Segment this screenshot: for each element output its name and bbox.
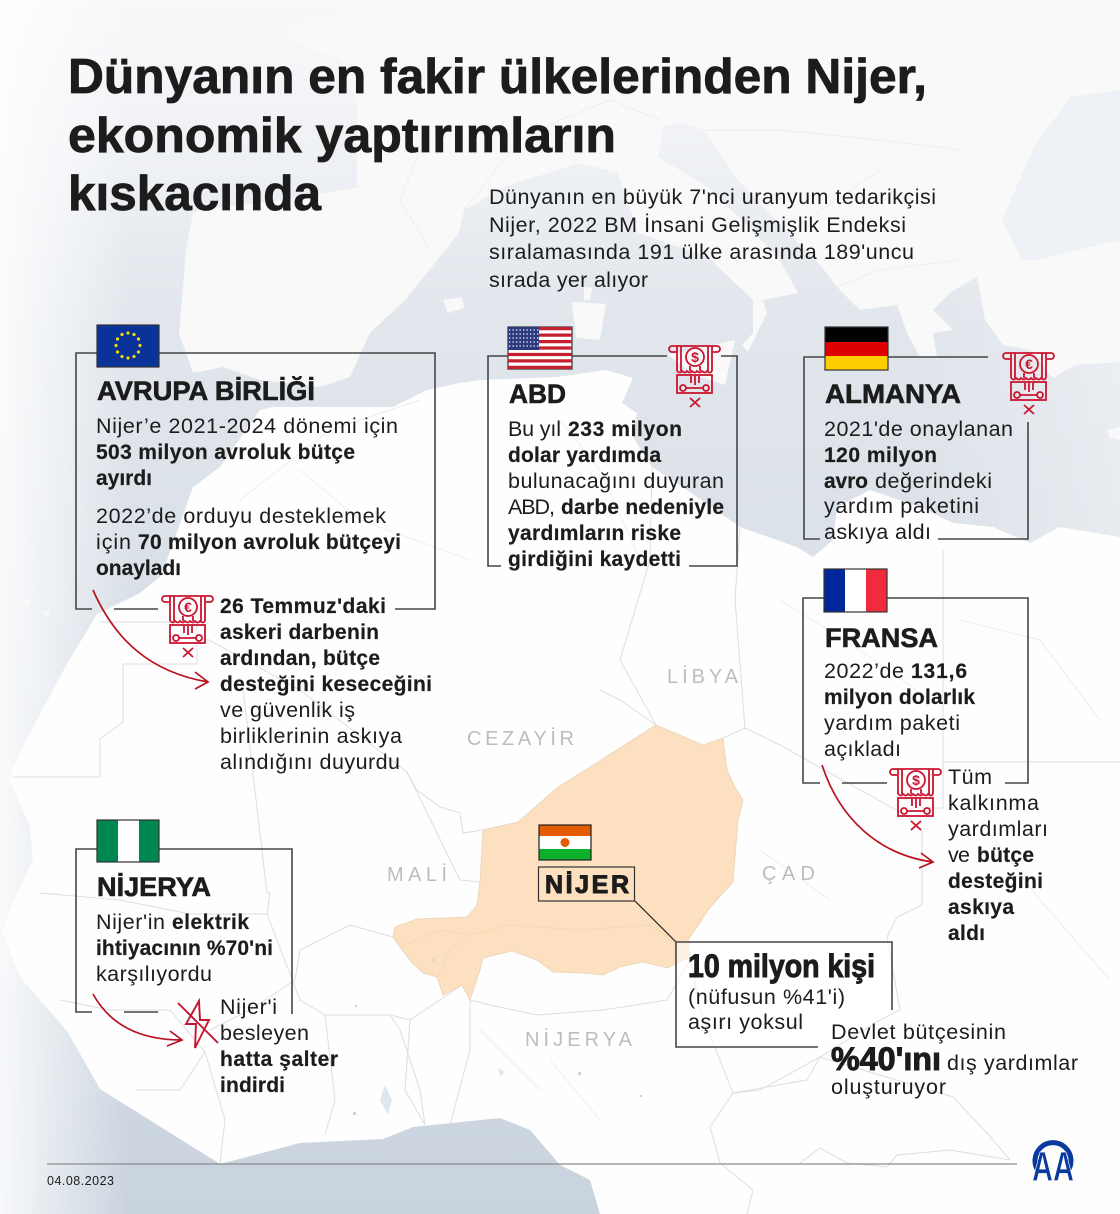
map labels: LİBYA <box>667 665 739 688</box>
callout: 10 milyon kişi <box>676 942 892 1047</box>
text block: response: desteğini keseceğini <box>220 673 432 696</box>
text block: budget: 2022’de orduyu desteklemek <box>96 504 386 528</box>
text block: response: askıya <box>948 896 1014 919</box>
callout: budget share: oluşturuyor <box>831 1075 946 1099</box>
text block: dolar yardımda <box>508 444 661 467</box>
text block: response: birliklerinin askıya <box>220 724 402 748</box>
map labels: CEZAYİR <box>467 727 574 750</box>
text block: response: desteğini <box>948 870 1043 893</box>
arrow <box>93 590 208 689</box>
intro text: sırada yer alıyor <box>489 268 648 292</box>
heading: FRANSA <box>825 623 938 653</box>
text block: response: besleyen <box>220 1021 309 1045</box>
heading: AVRUPA BİRLİĞİ <box>97 375 315 406</box>
panel: Nijerya <box>76 820 338 1097</box>
intro text: Nijer, 2022 BM İnsani Gelişmişlik Endeksi <box>489 213 906 237</box>
footer line <box>47 1163 1017 1165</box>
Black Sea <box>1002 90 1120 260</box>
text block: response <box>948 765 1048 945</box>
flag: Germany <box>825 327 888 370</box>
text block: budget: Nijer’e 2021-2024 dönemi için <box>96 414 398 438</box>
callout: 10 milyon kişi: 10 milyon kişi <box>688 948 875 984</box>
text block: aid: milyon dolarlık <box>824 686 975 709</box>
text block: ABD, <box>508 495 555 519</box>
panel: Fransa <box>803 569 1048 945</box>
text block: budget: onayladı <box>96 557 181 580</box>
text block: aid <box>824 659 975 761</box>
text block: response: ardından, bütçe <box>220 647 380 670</box>
flag: Niger <box>539 825 591 860</box>
intro text: sıralamasında 191 ülke arasında 189'uncu <box>489 240 914 264</box>
flag: Nigeria <box>97 820 159 862</box>
text block <box>508 417 724 571</box>
icon: cash machine cancelled <box>669 346 720 407</box>
flag: France <box>824 569 887 612</box>
icon: cash machine cancelled: € <box>1025 356 1033 372</box>
text block: budget: 503 milyon avroluk bütçe <box>96 441 355 464</box>
callout: budget share: %40'ını <box>831 1041 941 1077</box>
intro text: Dünyanın en büyük 7'nci uranyum tedarikçisi <box>489 185 936 209</box>
text block: budget: için <box>96 530 131 554</box>
text block: response: kalkınma <box>948 791 1039 815</box>
text block: değerindeki <box>875 469 992 493</box>
text block: budget: ayırdı <box>96 467 152 490</box>
heading: ABD <box>509 379 566 409</box>
panel frame <box>76 353 435 609</box>
callout: budget share: dış yardımlar <box>947 1051 1078 1075</box>
icon: power cut <box>178 1001 218 1048</box>
panel frame <box>803 598 1028 783</box>
logo: AA <box>1032 1143 1074 1190</box>
callout: budget share: Devlet bütçesinin <box>831 1020 1006 1044</box>
text block: response: bütçe <box>977 844 1034 867</box>
map labels <box>387 665 815 1051</box>
panel: Avrupa Birliği <box>76 325 435 774</box>
panel frame <box>804 357 1028 539</box>
title <box>68 50 927 221</box>
map labels: ÇAD <box>762 863 815 885</box>
arrow <box>822 765 933 868</box>
text block: aid: 131,6 <box>911 660 967 683</box>
text block: response: Nijer'i <box>220 995 277 1019</box>
text block: electricity: karşılıyordu <box>96 962 212 986</box>
text block: response <box>220 595 432 774</box>
callout: 10 milyon kişi: (nüfusun %41'i) <box>688 985 845 1009</box>
text block: budget <box>96 414 401 580</box>
Africa land <box>2 370 1120 1214</box>
panel: ABD <box>488 327 737 571</box>
icon: cash machine cancelled: $ <box>912 772 920 788</box>
text block: 233 milyon <box>568 418 682 441</box>
arrow <box>93 994 182 1046</box>
icon: cash machine cancelled <box>162 596 213 657</box>
text block: response: ve <box>948 843 970 867</box>
text block: 2021'de onaylanan <box>824 417 1013 441</box>
Niger shape <box>393 725 743 1000</box>
text block: avro <box>824 470 868 493</box>
panel frame <box>488 356 737 566</box>
text block: response: yardımları <box>948 817 1048 841</box>
text block: electricity: elektrik <box>172 911 249 934</box>
text block: yardım paketini <box>824 494 979 518</box>
Europe land <box>179 0 1120 387</box>
text block: response: ve güvenlik iş <box>220 698 355 722</box>
title: kıskacında <box>68 167 322 221</box>
text block: budget: 70 milyon avroluk bütçeyi <box>138 531 401 554</box>
icon: cash machine cancelled: € <box>184 599 192 615</box>
map labels: MALİ <box>387 863 447 886</box>
date: 04.08.2023 <box>47 1174 114 1188</box>
text block: aid: açıkladı <box>824 737 901 761</box>
flag: EU <box>97 325 159 367</box>
callout: 10 milyon kişi: aşırı yoksul <box>688 1010 803 1034</box>
text block: yardımların riske <box>508 522 681 545</box>
text block: aid: 2022’de <box>824 659 904 683</box>
icon: cash machine cancelled <box>890 769 941 830</box>
leader line <box>635 901 676 942</box>
flag: USA <box>508 327 572 369</box>
title: ekonomik yaptırımların <box>68 109 616 163</box>
text block: 120 milyon <box>824 444 937 467</box>
islands <box>20 287 1120 618</box>
text block: response: hatta şalter <box>220 1048 338 1071</box>
borders <box>207 639 483 833</box>
heading: NİJERYA <box>97 872 211 902</box>
title: Dünyanın en fakir ülkelerinden Nijer, <box>68 50 927 104</box>
text block: response: askeri darbenin <box>220 621 379 644</box>
text block <box>824 417 1013 544</box>
text block: aid: yardım paketi <box>824 711 960 735</box>
text block: girdiğini kaydetti <box>508 548 681 571</box>
panel frame <box>76 849 292 1014</box>
heading: ALMANYA <box>825 379 961 409</box>
logo: AA: AA <box>1032 1143 1074 1190</box>
text block: response: indirdi <box>220 1074 285 1097</box>
text block: Bu yıl <box>508 417 561 441</box>
text block: darbe nedeniyle <box>561 496 724 519</box>
icon: cash machine cancelled <box>1003 353 1054 414</box>
text block: response: Tüm <box>948 765 992 789</box>
map labels: NİJERYA <box>525 1028 633 1051</box>
text block: bulunacağını duyuran <box>508 469 724 493</box>
callout: budget share <box>831 1020 1078 1099</box>
text block: response: 26 Temmuz'daki <box>220 595 386 618</box>
text block: electricity: ihtiyacının %70'ni <box>96 937 273 960</box>
text block: electricity <box>96 910 273 986</box>
lakes and city speckle <box>380 1068 505 1115</box>
text block: electricity: Nijer'in <box>96 910 165 934</box>
label: Nijer: NİJER <box>545 871 629 899</box>
intro text <box>489 185 936 292</box>
text block: response: alındığını duyurdu <box>220 750 400 774</box>
panel: Almanya <box>804 327 1054 544</box>
text block: askıya aldı <box>824 520 931 544</box>
text block: response <box>220 995 338 1097</box>
text block: response: aldı <box>948 922 985 945</box>
icon: cash machine cancelled: $ <box>691 349 699 365</box>
